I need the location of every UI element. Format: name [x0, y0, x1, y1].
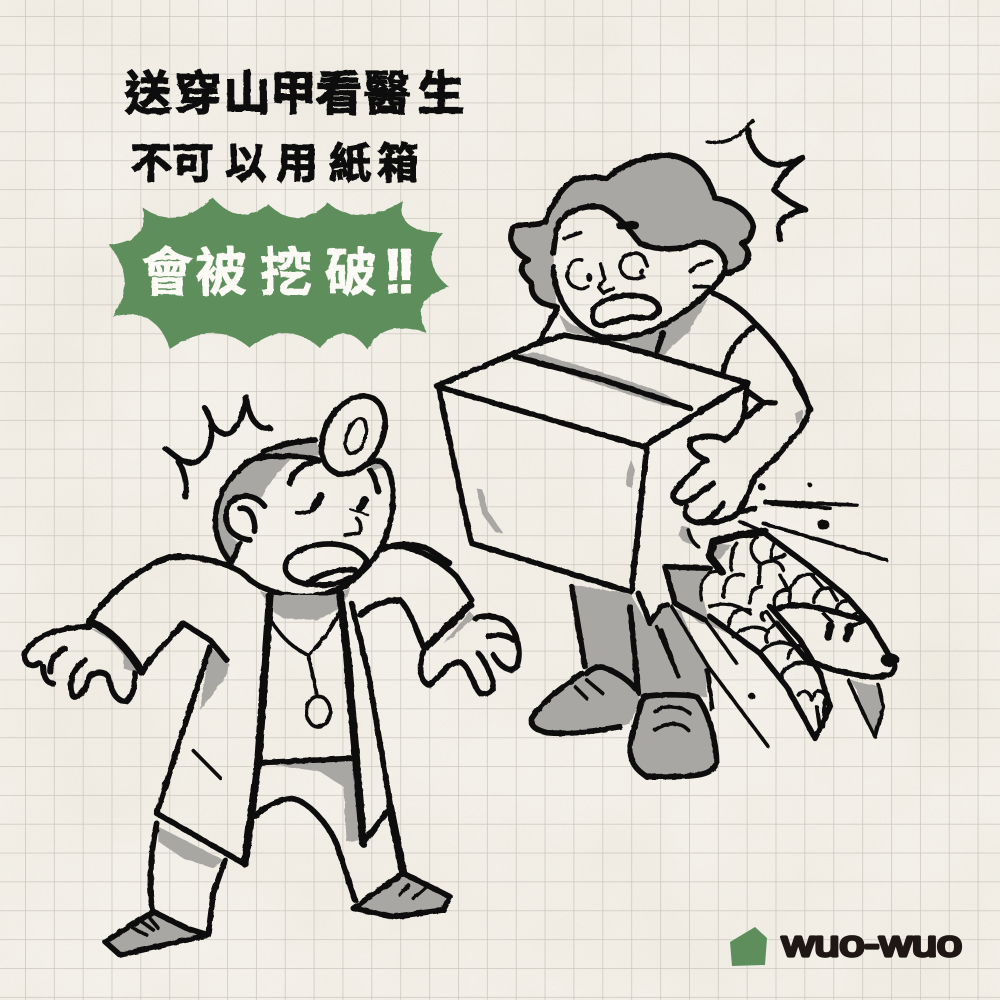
right arm: [360, 546, 472, 647]
coat front: [245, 597, 270, 863]
shirt shade: [263, 762, 363, 842]
speed line stub: [763, 503, 830, 543]
mouth: [285, 544, 367, 585]
left cuff: [90, 622, 142, 672]
chin shadow: [260, 587, 350, 619]
fin outline: [848, 680, 883, 737]
right shoe: [630, 695, 717, 777]
hair tuft: [620, 213, 635, 237]
thumb: [710, 532, 765, 572]
neck shade: [273, 595, 337, 620]
eyes: [828, 626, 850, 638]
left eye lid: [297, 511, 312, 513]
pangolin in owner's hand: [662, 502, 899, 738]
speed dots: [748, 483, 829, 699]
face outline: [553, 267, 725, 338]
hairline: [553, 206, 725, 267]
right cuff shade: [443, 612, 475, 643]
title: [124, 67, 464, 187]
surprise marks: owner: [707, 121, 805, 239]
stethoscope end: [306, 696, 330, 727]
left shoe outline: [531, 667, 635, 733]
eyebrows and ear: [564, 233, 712, 287]
left arm: [90, 556, 227, 673]
trouser crease: [657, 607, 713, 708]
right shoe outline: [630, 695, 717, 777]
neck and shoulder: [538, 293, 810, 410]
heading line 1: 送穿山甲看醫生: [124, 67, 464, 120]
hair outline: [215, 440, 390, 562]
brows: [823, 613, 863, 628]
right eye: [360, 500, 365, 508]
right eye: [620, 253, 647, 279]
right eye lash and nose: [350, 509, 368, 515]
character: doctor: [25, 385, 519, 955]
nose: [598, 264, 613, 293]
long speed line: [708, 667, 768, 747]
left hand: [25, 627, 135, 702]
owner legs and shoes: [530, 585, 768, 777]
left eye: [313, 496, 321, 508]
hand shade: [678, 527, 695, 545]
trousers fill: [572, 585, 707, 697]
character: worried owner with box: [437, 155, 830, 777]
finger crease: [688, 530, 698, 547]
surprise marks: [165, 397, 270, 497]
right shoe marks: [655, 707, 690, 730]
nose blob: [881, 653, 899, 667]
right hand: [421, 616, 519, 694]
box top edges: [437, 335, 748, 410]
thumb gray: [715, 543, 732, 559]
pocket: [193, 751, 221, 778]
doctor head: [150, 385, 450, 619]
trousers lines: [572, 587, 667, 693]
logo: [730, 923, 962, 966]
shirt hem: [258, 758, 353, 763]
burst shape: [109, 197, 449, 350]
hair fill: [215, 440, 320, 562]
callout text: !!: [382, 235, 417, 307]
sleeve outline: [665, 567, 710, 620]
sleeve shade: [200, 647, 230, 710]
coat right edge: [352, 603, 390, 843]
callout: green burst: [109, 197, 449, 350]
head right side: [358, 470, 393, 575]
mirror centre: [341, 416, 371, 456]
left shoe outline: [105, 912, 208, 955]
lower speed lines: [662, 622, 737, 710]
scales: [701, 537, 860, 677]
leg shade: [158, 827, 223, 868]
sleeve shape: [665, 568, 727, 633]
nose: [345, 518, 361, 535]
owner head and hair: [511, 155, 810, 410]
mouth: [593, 295, 659, 325]
heading line 2: 不可以用紙箱: [130, 140, 419, 187]
left leg: [150, 823, 225, 933]
right cuff: [427, 605, 470, 647]
tape shadow: [520, 353, 690, 408]
far arm and elbow: [738, 380, 810, 513]
chin shadow: [558, 298, 708, 355]
wordmark: wuo-wuo: [781, 923, 962, 964]
callout text: 會被挖破: [141, 245, 377, 303]
cuff shade: [90, 628, 138, 673]
left shoe marks: [133, 918, 158, 935]
right shoe: [353, 873, 450, 917]
right leg edge: [390, 807, 403, 873]
tail: [798, 691, 827, 730]
cardboard box: [437, 335, 748, 410]
box shade marks: [477, 460, 635, 533]
right shoe outline: [353, 873, 450, 917]
head mirror: [309, 385, 398, 485]
body outline: [710, 533, 895, 738]
speed lines: [740, 502, 887, 560]
elbow shade: [795, 409, 803, 424]
hair fill: [511, 155, 753, 307]
left shoe marks: [575, 680, 603, 698]
left shoe: [530, 667, 640, 735]
icon: green house: [730, 927, 767, 966]
coat right side: [340, 593, 363, 843]
hair band fill: [370, 457, 388, 471]
coat: [157, 647, 243, 863]
fin: [850, 680, 883, 737]
right pupil: [639, 268, 644, 275]
left pupil: [586, 273, 592, 282]
stethoscope: [272, 613, 338, 693]
doctor body: [25, 546, 519, 955]
crotch curve: [255, 798, 355, 900]
ear: [226, 496, 265, 540]
chin and shoulders: [150, 544, 450, 597]
left eye: [567, 260, 588, 289]
hand: [673, 410, 755, 522]
left shoe: [105, 912, 208, 955]
box body: [438, 380, 830, 699]
hair outline: [511, 155, 753, 307]
right shoe marks: [400, 885, 427, 898]
box edges: [438, 383, 747, 592]
